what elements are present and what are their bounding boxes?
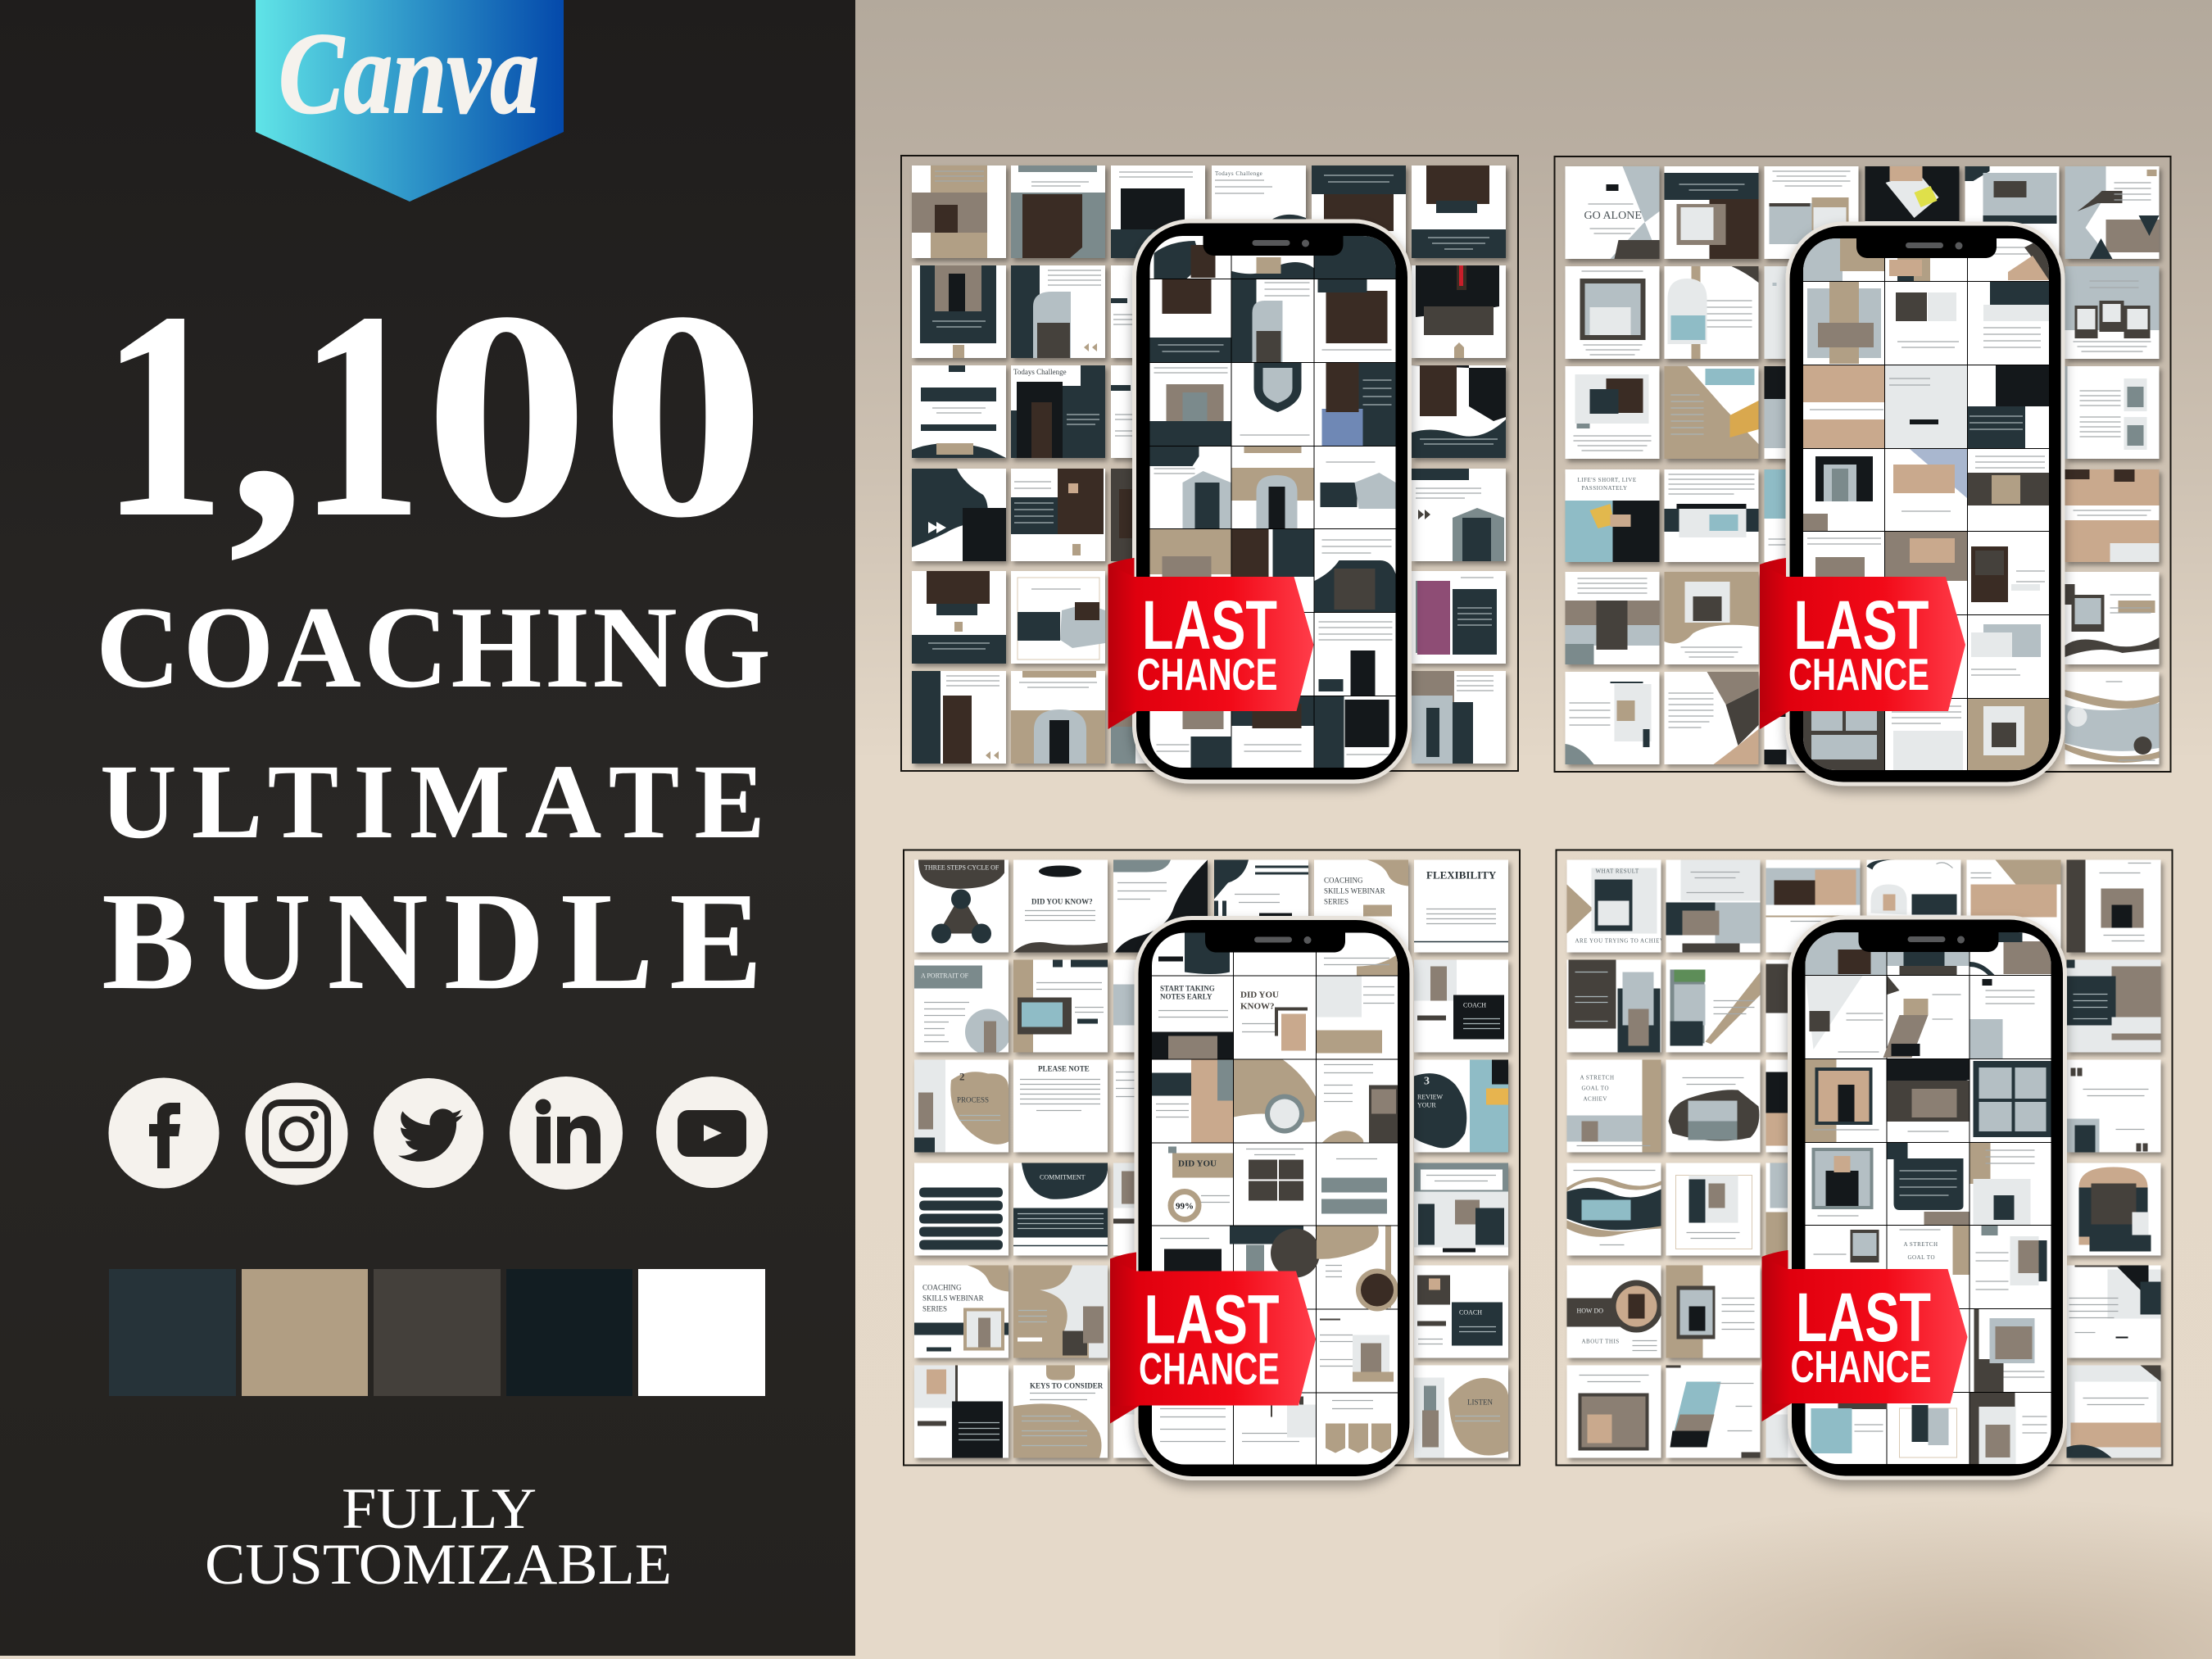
icon: facebook	[108, 1078, 220, 1188]
tile D	[1568, 960, 1660, 1052]
last chance ribbon: CHANCE	[1139, 1344, 1280, 1394]
phone screen	[1150, 236, 1396, 768]
tile D	[1666, 860, 1760, 952]
phone screen: 99%	[1176, 1201, 1194, 1211]
tile B	[1665, 572, 1758, 664]
tile D	[1766, 963, 1788, 1013]
tile B	[1668, 266, 1758, 359]
tile B	[2065, 266, 2160, 351]
heading: 1,100: 0	[600, 250, 766, 578]
tile A: Todays Challenge	[1013, 368, 1067, 376]
tile D: ABOUT THIS	[1581, 1339, 1620, 1345]
heading: COACHING: COACHING	[96, 582, 771, 712]
last chance ribbon: CHANCE	[1788, 649, 1929, 700]
tile C	[1013, 960, 1108, 1052]
tile C: A PORTRAIT OF	[921, 972, 969, 980]
icon: youtube	[656, 1077, 768, 1188]
tile A	[912, 165, 987, 258]
tile B: GO ALONE	[1584, 210, 1642, 222]
phone screen: NOTES EARLY	[1160, 993, 1213, 1001]
tile C: LISTEN	[1467, 1398, 1493, 1406]
tile B	[2065, 584, 2160, 665]
tile D	[1971, 860, 2061, 918]
tile A	[1111, 469, 1132, 561]
heading: 1,100: 1	[298, 251, 424, 579]
phone screen: START TAKING	[1160, 985, 1215, 993]
tile C	[1414, 960, 1504, 1039]
phone C	[1110, 918, 1412, 1478]
tile A	[912, 571, 1006, 664]
tile B	[1865, 166, 1960, 221]
tile C	[1013, 1265, 1108, 1358]
tile C	[914, 965, 1011, 1055]
last chance ribbon: LAST	[1794, 587, 1929, 664]
tile C	[1013, 1365, 1104, 1458]
tile C	[919, 1188, 1003, 1250]
tile C	[1417, 1275, 1503, 1345]
tile A	[1011, 671, 1105, 764]
tile C: FLEXIBILITY	[1426, 868, 1497, 882]
last chance ribbon	[1760, 558, 1965, 729]
tile A: Todays Challenge	[1215, 170, 1262, 177]
tile D	[1566, 868, 1671, 944]
tile C	[1113, 1265, 1135, 1358]
phone notch	[1856, 235, 1997, 258]
phone screen: DID YOU	[1240, 990, 1279, 999]
phone screen: GOAL TO	[1907, 1254, 1935, 1261]
tile D	[1766, 1072, 1788, 1145]
tile A	[1312, 165, 1406, 231]
tile C	[1020, 1065, 1100, 1111]
tile A	[1215, 170, 1306, 220]
tile C	[918, 860, 1004, 944]
tile C: DID YOU KNOW?	[1031, 898, 1093, 906]
last chance ribbon	[1761, 1250, 1968, 1421]
tile B	[1765, 366, 1786, 448]
tile D: ARE YOU TRYING TO ACHIEVE?	[1575, 937, 1671, 944]
icon: linkedin	[510, 1077, 623, 1190]
heading: 1,100: 1	[101, 251, 226, 579]
tile C	[914, 1365, 1003, 1458]
tile D	[1566, 1060, 1661, 1152]
tile D: WHAT RESULT	[1596, 868, 1639, 875]
tile B: PASSIONATELY	[1581, 485, 1627, 492]
tile backgrounds	[1566, 860, 2161, 1458]
tile B	[2065, 166, 2160, 259]
tile A	[1011, 165, 1105, 258]
tile C	[914, 1060, 1009, 1152]
panel: mosaic A today's challenge	[901, 156, 1518, 782]
tile A	[1018, 578, 1105, 660]
tile A	[920, 265, 996, 358]
phone screen: KNOW?	[1240, 1001, 1275, 1011]
last chance ribbon	[1110, 1252, 1316, 1424]
tile B	[1665, 173, 1758, 259]
tile C: COACHING	[922, 1283, 962, 1291]
tile C: PLEASE NOTE	[1038, 1065, 1090, 1073]
tile C	[1414, 1163, 1508, 1252]
phone screen: A STRETCH	[1904, 1241, 1938, 1248]
tile A	[1412, 469, 1504, 561]
tile B	[1770, 171, 1850, 244]
tile C	[1113, 1163, 1135, 1224]
panel: mosaic B quotes	[1555, 156, 2171, 784]
tile B	[1565, 578, 1660, 664]
panel: mosaic C webinar and did you know	[904, 850, 1520, 1478]
tile A	[912, 671, 999, 764]
phone notch	[1203, 233, 1344, 256]
tile D	[2066, 1365, 2161, 1458]
tile C	[1113, 1365, 1135, 1414]
text: FULLY: FULLY	[342, 1477, 537, 1541]
tile B	[1565, 682, 1652, 764]
tile D	[2066, 960, 2161, 1052]
tile C: COACH	[1463, 1001, 1486, 1009]
tile D	[1666, 1365, 1760, 1458]
tile D	[2069, 1265, 2161, 1339]
heading: BUNDLE: BUNDLE	[102, 863, 763, 1018]
tile C: SERIES	[922, 1304, 947, 1312]
tile D	[1578, 1375, 1648, 1450]
tile D	[1668, 1078, 1759, 1140]
tile B	[2065, 366, 2146, 459]
phone B	[1760, 224, 2063, 784]
tile C	[1414, 868, 1508, 942]
tile A	[1011, 365, 1105, 458]
tile C	[1116, 1072, 1135, 1096]
tile A	[912, 469, 1006, 561]
tile C	[1013, 1163, 1108, 1245]
tile D	[1766, 1414, 1788, 1458]
tile D	[1766, 868, 1860, 921]
tile A	[912, 365, 1006, 458]
tile B	[1668, 672, 1758, 764]
tile A	[1111, 700, 1135, 764]
tile D	[2066, 1068, 2148, 1152]
tile C	[1324, 860, 1408, 916]
tile A	[1416, 578, 1497, 655]
tile B	[1665, 366, 1758, 459]
tile C: SKILLS WEBINAR	[1324, 886, 1385, 895]
phone notch	[1205, 929, 1345, 952]
tile D	[2079, 1167, 2151, 1252]
tile C	[1414, 1378, 1509, 1458]
last chance ribbon	[1108, 558, 1314, 729]
tile A	[1111, 385, 1132, 437]
tile A	[1111, 612, 1135, 645]
tile C: 3	[1424, 1075, 1430, 1088]
tile C: KEYS TO CONSIDER	[1030, 1381, 1104, 1389]
tile C: YOUR	[1417, 1101, 1436, 1109]
panel: mosaic D questions	[1557, 850, 2173, 1478]
tile D	[1566, 1280, 1663, 1350]
last chance ribbon: LAST	[1796, 1279, 1931, 1356]
tile B	[2065, 469, 2160, 562]
tile C: PROCESS	[957, 1096, 989, 1104]
tile C: SERIES	[1324, 898, 1349, 906]
phone A	[1108, 221, 1409, 782]
heading: 1,100: ,	[228, 251, 306, 579]
icon: instagram	[246, 1083, 347, 1185]
tile C	[1414, 1060, 1508, 1152]
text: CUSTOMIZABLE: CUSTOMIZABLE	[205, 1533, 672, 1597]
tile B	[1765, 266, 1786, 359]
phone notch	[1858, 929, 1999, 952]
tile B	[1765, 469, 1786, 545]
tile A	[1011, 265, 1101, 358]
tile C	[1113, 860, 1208, 952]
tile A	[1011, 469, 1104, 555]
tile A	[1412, 165, 1506, 258]
tile D	[1766, 1163, 1788, 1255]
tile B	[1765, 696, 1786, 764]
tile D	[1866, 860, 1956, 914]
tile A	[1111, 298, 1132, 325]
tile D	[2066, 860, 2151, 952]
tile B	[2065, 682, 2160, 763]
tile B	[1580, 271, 1645, 355]
badge: Canva ribbon	[256, 0, 564, 202]
tile B	[1765, 621, 1786, 646]
badge: Canva ribbon: Canva	[279, 8, 539, 138]
tile backgrounds	[912, 165, 1506, 764]
tile B	[1965, 166, 2056, 224]
tile C	[1013, 865, 1108, 952]
tile C: THREE STEPS CYCLE OF	[924, 863, 999, 872]
tile backgrounds	[1565, 166, 2160, 764]
tile A	[1412, 671, 1494, 764]
tile C: SKILLS WEBINAR	[922, 1294, 984, 1303]
tile B	[1584, 166, 1660, 259]
tile D	[1670, 970, 1760, 1045]
last chance ribbon: LAST	[1144, 1281, 1280, 1358]
last chance ribbon: LAST	[1142, 587, 1277, 664]
tile D	[1666, 1265, 1755, 1358]
tile B	[1565, 477, 1660, 562]
tile C: COACH	[1459, 1309, 1482, 1316]
tile B	[1665, 474, 1758, 537]
tile D: GOAL TO	[1581, 1085, 1609, 1091]
tile A	[1412, 365, 1506, 458]
heading: 1,100: 0	[424, 250, 590, 578]
phone screen: DID YOU	[1178, 1158, 1217, 1168]
tile D	[1566, 1170, 1661, 1245]
tile A	[1416, 265, 1499, 358]
tile C: COMMITMENT	[1040, 1173, 1086, 1181]
tile D	[1766, 1281, 1788, 1314]
tile A	[1111, 171, 1193, 258]
phone screen	[1152, 932, 1398, 1465]
tile C: REVIEW	[1417, 1093, 1444, 1101]
icon: twitter	[374, 1078, 483, 1188]
tile B	[1573, 374, 1652, 451]
tile C	[914, 1265, 1009, 1352]
tile D	[1676, 1175, 1752, 1249]
phone D	[1761, 918, 2065, 1478]
tile C: COACHING	[1324, 877, 1363, 885]
tile D: HOW DO	[1576, 1308, 1603, 1314]
last chance ribbon: CHANCE	[1137, 649, 1278, 700]
heading: 1,100	[101, 250, 766, 579]
colour palette swatches	[109, 1269, 765, 1396]
tile backgrounds	[914, 860, 1508, 1458]
phone screen	[1806, 932, 2051, 1464]
tile C: 2	[959, 1070, 965, 1083]
tile D: A STRETCH	[1580, 1075, 1615, 1081]
tile C	[1113, 985, 1135, 1026]
heading: ULTIMATE: ULTIMATE	[100, 743, 765, 861]
panel: left dark sidebar	[0, 0, 855, 1656]
tile C	[1214, 860, 1308, 950]
tile D: ACHIEV	[1583, 1096, 1607, 1103]
phone screen	[1803, 235, 2049, 770]
last chance ribbon: CHANCE	[1791, 1341, 1932, 1392]
tile B: LIFE'S SHORT, LIVE	[1578, 477, 1637, 483]
